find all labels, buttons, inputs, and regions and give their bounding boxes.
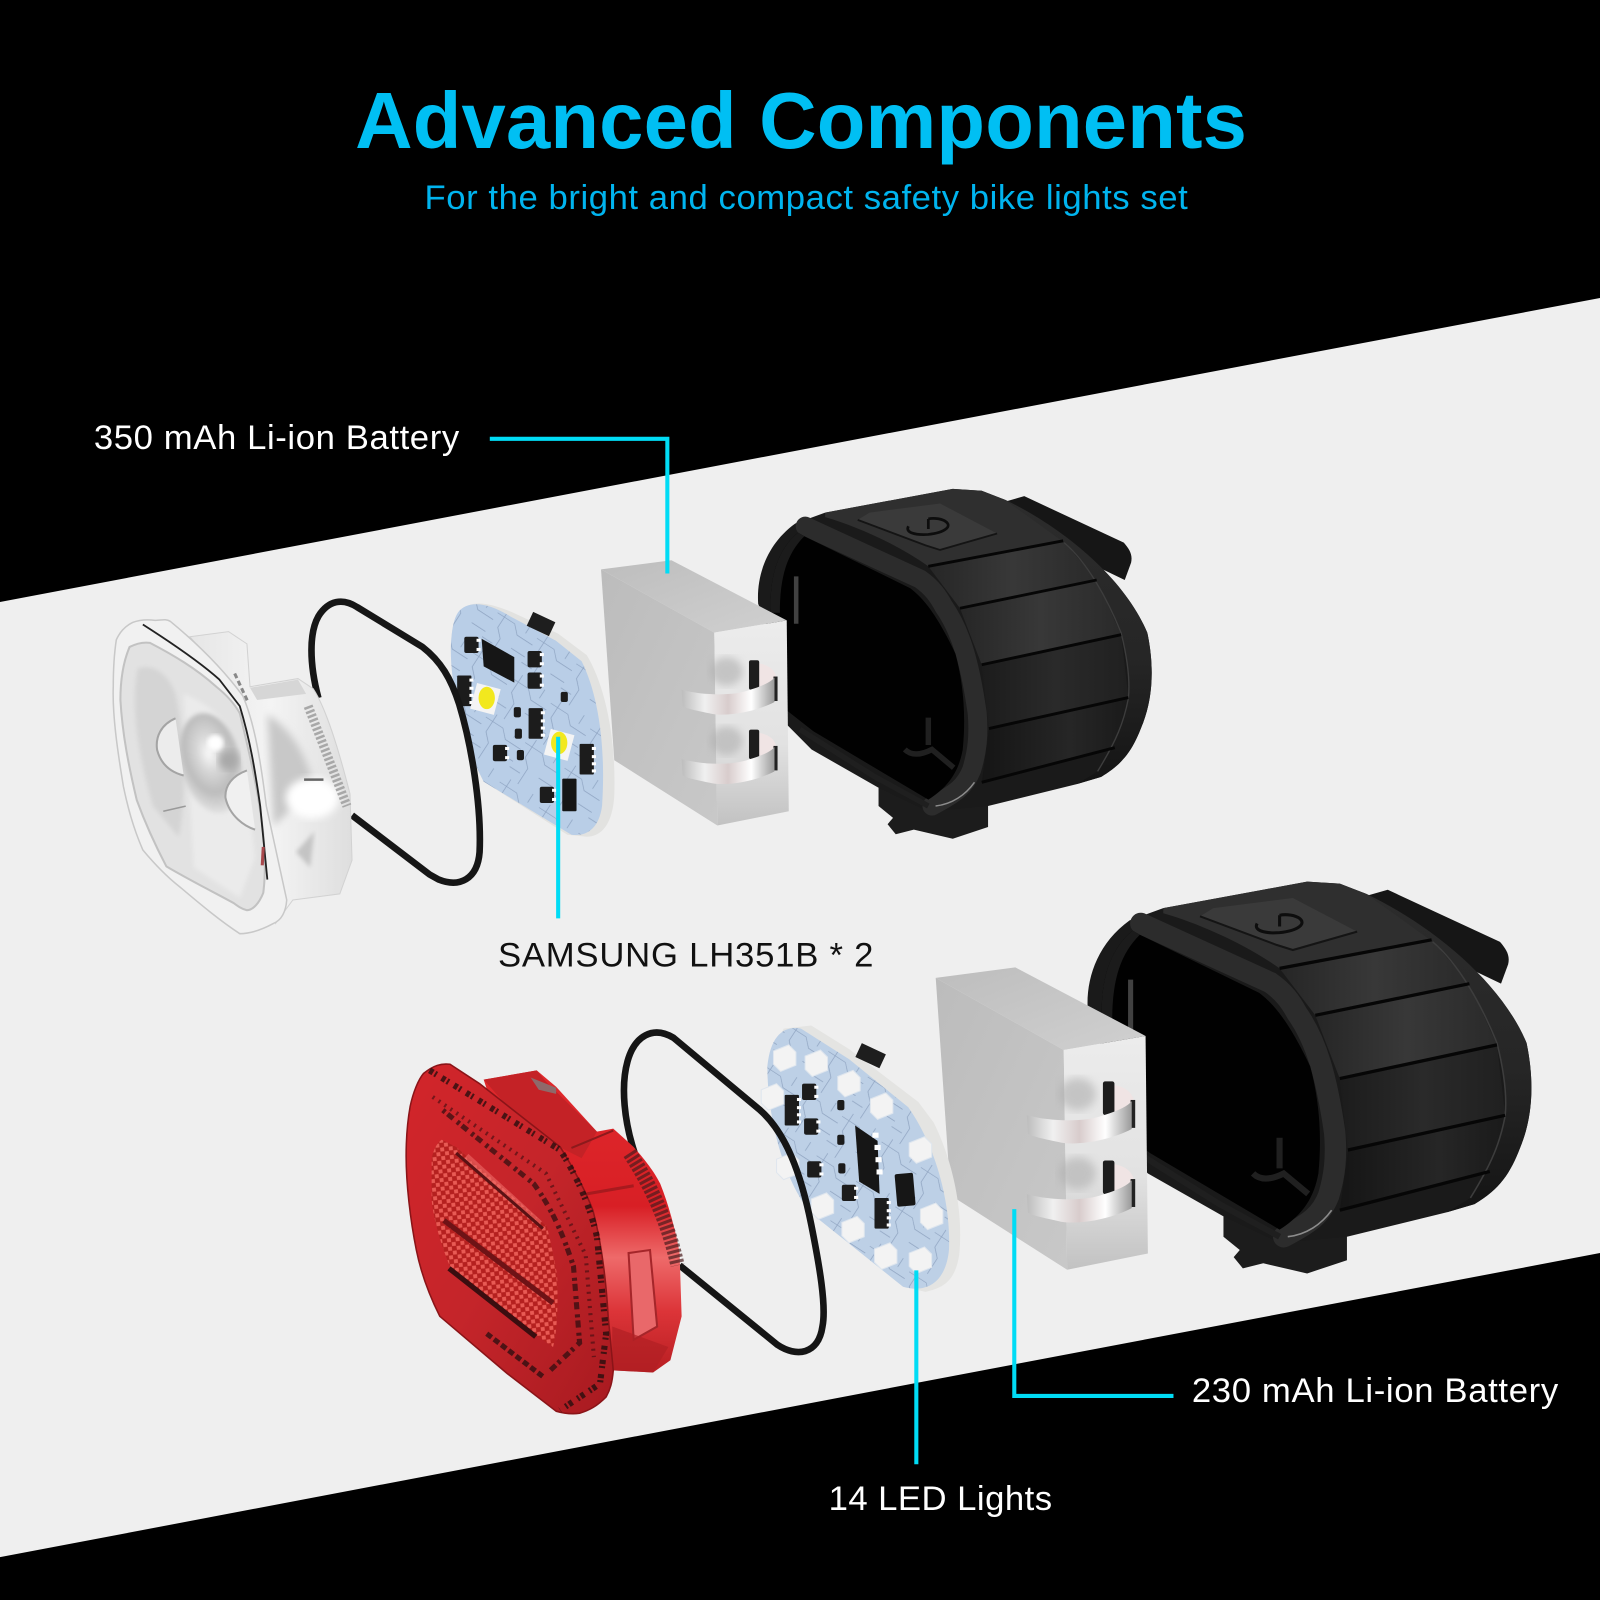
title: Advanced Components [355,76,1247,165]
callout: 350 mAh battery [94,419,667,573]
callout line [556,737,560,918]
callout label: 230 mAh Li-ion Battery [1192,1372,1559,1410]
diagonal light band [0,298,1600,1557]
callout label: 350 mAh Li-ion Battery [94,419,460,457]
callout: 230 mAh battery [1014,1209,1559,1410]
LED: Samsung chip [479,687,495,709]
callout line [1014,1209,1173,1396]
callout label: 14 LED Lights [829,1480,1052,1518]
circuit board: front light [451,603,615,837]
LED: Samsung chip 2 [551,732,567,754]
callout line [490,439,667,573]
rear light exploded view [406,882,1531,1414]
battery: 350 mAh block [601,560,789,826]
lens: clear front lens [113,620,352,934]
seal ring: front light [311,602,480,883]
housing: front light black case [758,489,1152,839]
lens: red rear lens [406,1064,682,1414]
circuit board: rear light [761,1026,960,1292]
battery: 230 mAh block [936,967,1148,1270]
front light exploded view [113,489,1152,934]
housing: rear light black case [1088,882,1531,1273]
callout line [914,1270,918,1464]
callout label: SAMSUNG LH351B * 2 [498,936,873,974]
subtitle: For the bright and compact safety bike lights set [424,179,1188,217]
seal ring: rear light [624,1033,824,1352]
